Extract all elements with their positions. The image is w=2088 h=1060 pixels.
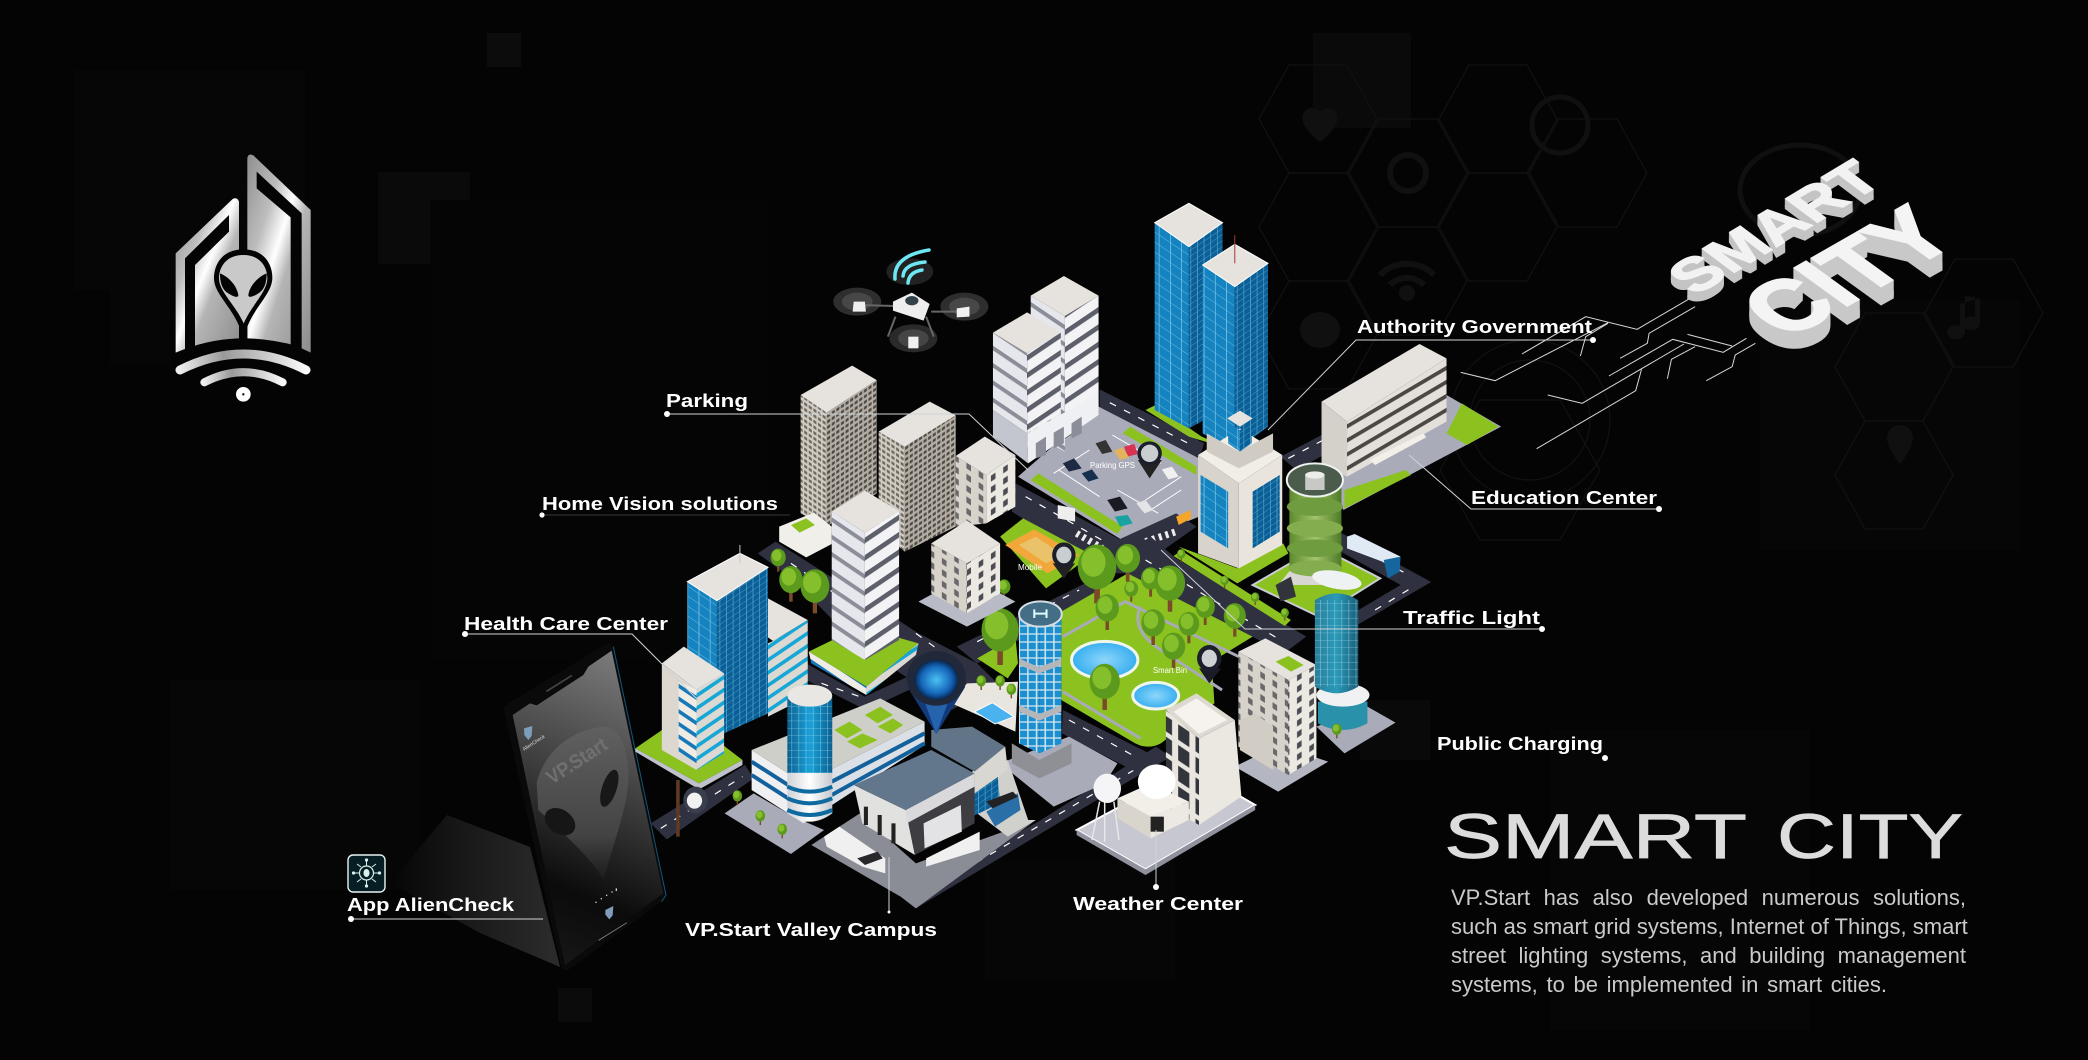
pond: large [1072,641,1138,679]
blue tower rear [1155,203,1223,428]
tiny map labels: Smart Bin [1153,666,1187,675]
label: Education Center [1409,455,1662,512]
campus shuttle bus [824,827,885,873]
blue location pin [907,651,966,734]
description text [1451,885,1968,997]
beige tower C [956,437,1015,527]
tiny map labels: Parking GPS [1090,461,1135,470]
buildings: lower city [635,491,1396,875]
parking bays [1054,435,1181,513]
description text: street lighting systems, and building management [1451,943,1966,968]
label: Home Vision solutions [539,494,790,518]
label: App AlienCheck: App AlienCheck [347,895,515,915]
wide white clinic [752,698,925,823]
phone screen text [522,734,612,789]
teal oval tower [1308,567,1396,753]
label: Health Care Center: Health Care Center [464,614,668,634]
parked cars [1058,440,1191,527]
logo: alien smart building [172,154,315,402]
description text: systems, to be implemented in smart cities. [1451,972,1887,997]
glass cylinder tower [787,685,832,822]
health care: stripe wing [768,598,808,717]
phone screen text: VP.Start [543,734,612,789]
education center [1322,344,1447,477]
3D lettering: CITY: CITY [1719,191,1977,352]
pin: court [1052,542,1076,578]
blue tower front [1203,235,1268,452]
icon: App AlienCheck [348,855,385,892]
description text: VP.Start has also developed numerous solutions, [1451,885,1966,910]
pin: smart bin [1197,645,1222,683]
weather center [1077,693,1255,875]
apartment block: park east [1235,638,1328,792]
white tower rear [1031,276,1099,452]
label: Public Charging [1437,734,1608,761]
label: Authority Government [1268,317,1596,430]
helipad tower [1012,601,1072,778]
phone: AlienCheck app [503,643,666,971]
label: Traffic Light: Traffic Light [1403,608,1540,628]
3D lettering: SMART: SMART [1654,151,1896,304]
label: Weather Center [1073,830,1243,914]
plazas [1000,737,1117,807]
label: App AlienCheck [347,895,543,922]
green garden tower [1253,463,1380,617]
health care: blue tower [635,545,768,789]
education center pavement [1323,395,1501,510]
label: Weather Center: Weather Center [1073,894,1243,914]
delivery truck [1347,534,1401,578]
label: VP.Start Valley Campus: VP.Start Valley Campus [685,920,937,940]
trees: street [733,549,1289,838]
title: SMART CITY: CITY [1777,802,1963,872]
label: Health Care Center [462,614,698,700]
label: Parking [664,391,1028,470]
crosswalks [1077,532,1176,548]
buildings: upper city [779,203,1447,617]
label: Public Charging: Public Charging [1437,734,1603,754]
label: Home Vision solutions: Home Vision solutions [542,494,778,514]
park [1061,573,1253,747]
label: VP.Start Valley Campus [685,857,937,940]
circuit lines from 3D lettering [1461,299,1755,449]
title: SMART CITY [1444,802,1963,872]
beige apartment block [918,521,1015,627]
city ground: roads and plazas, upper [1000,389,1501,588]
phone screen text: AlienCheck [522,734,547,753]
hexagon network backdrop [1259,65,2043,540]
label: Traffic Light [1161,550,1545,632]
campus building [854,727,1036,867]
striped tower [809,491,918,695]
beige tower B [879,402,956,552]
title: SMART CITY: SMART [1444,802,1747,872]
tiny map labels [1018,461,1187,675]
utility pole and street camera [676,780,708,837]
pond: small [1133,682,1179,709]
faint icons in hexagons [1300,97,1980,464]
label: Parking: Parking [666,391,748,411]
white tower front [993,312,1099,463]
beige tower A [779,366,877,557]
drone [833,258,988,352]
civic tower [1179,411,1288,583]
phone shadow [390,815,560,967]
label: Authority Government: Authority Government [1357,317,1592,337]
icon: drone wifi signal [895,250,929,283]
description text: such as smart grid systems, Internet of Things, smart [1451,914,1968,939]
pin: parking GPS [1137,441,1162,478]
health care center [662,647,724,770]
city ground: roads, park and plazas, lower [651,533,1431,908]
trees: park [982,544,1246,710]
basketball court [1000,518,1092,588]
label: Education Center: Education Center [1471,488,1657,508]
tiny map labels: Mobile [1018,563,1043,572]
